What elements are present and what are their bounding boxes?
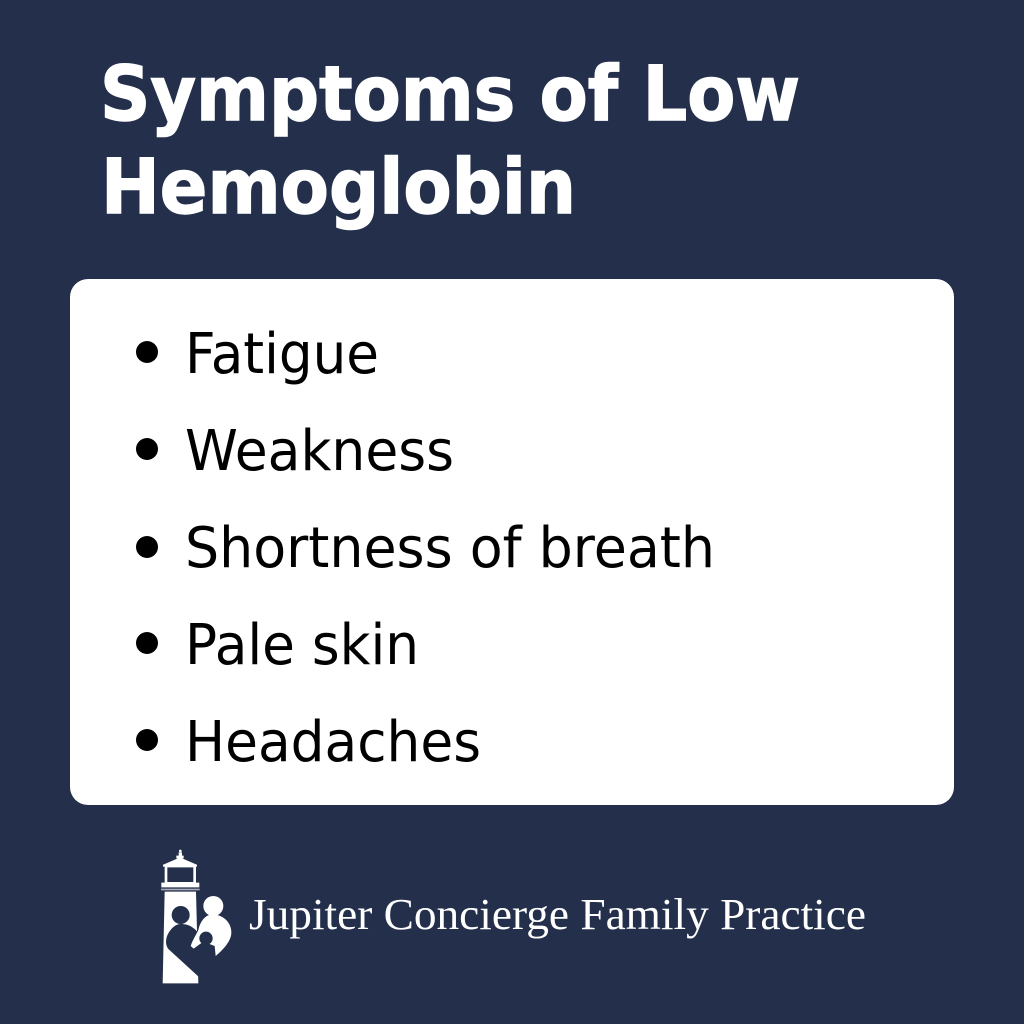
logo wordmark: Jupiter Concierge Family Practice [249,890,866,939]
list item: Shortness of breath: Shortness of breath [185,516,715,581]
panel: symptoms list [70,279,954,805]
gallery line [161,889,200,890]
parent figure in tower [166,906,199,977]
title [100,49,800,231]
lantern room [161,866,199,887]
list item: Headaches: Headaches [185,710,481,775]
child figure [199,932,215,957]
list item: Fatigue: Fatigue [185,322,379,387]
second parent figure [191,896,231,956]
title: Hemoglobin [101,142,576,231]
list item: Weakness: Weakness [185,419,454,484]
icon: lighthouse and family logo [161,850,231,983]
lighthouse finial [163,853,197,866]
lighthouse tower [163,892,198,983]
title: Symptoms of Low [100,49,800,138]
list item: Pale skin: Pale skin [185,613,419,678]
